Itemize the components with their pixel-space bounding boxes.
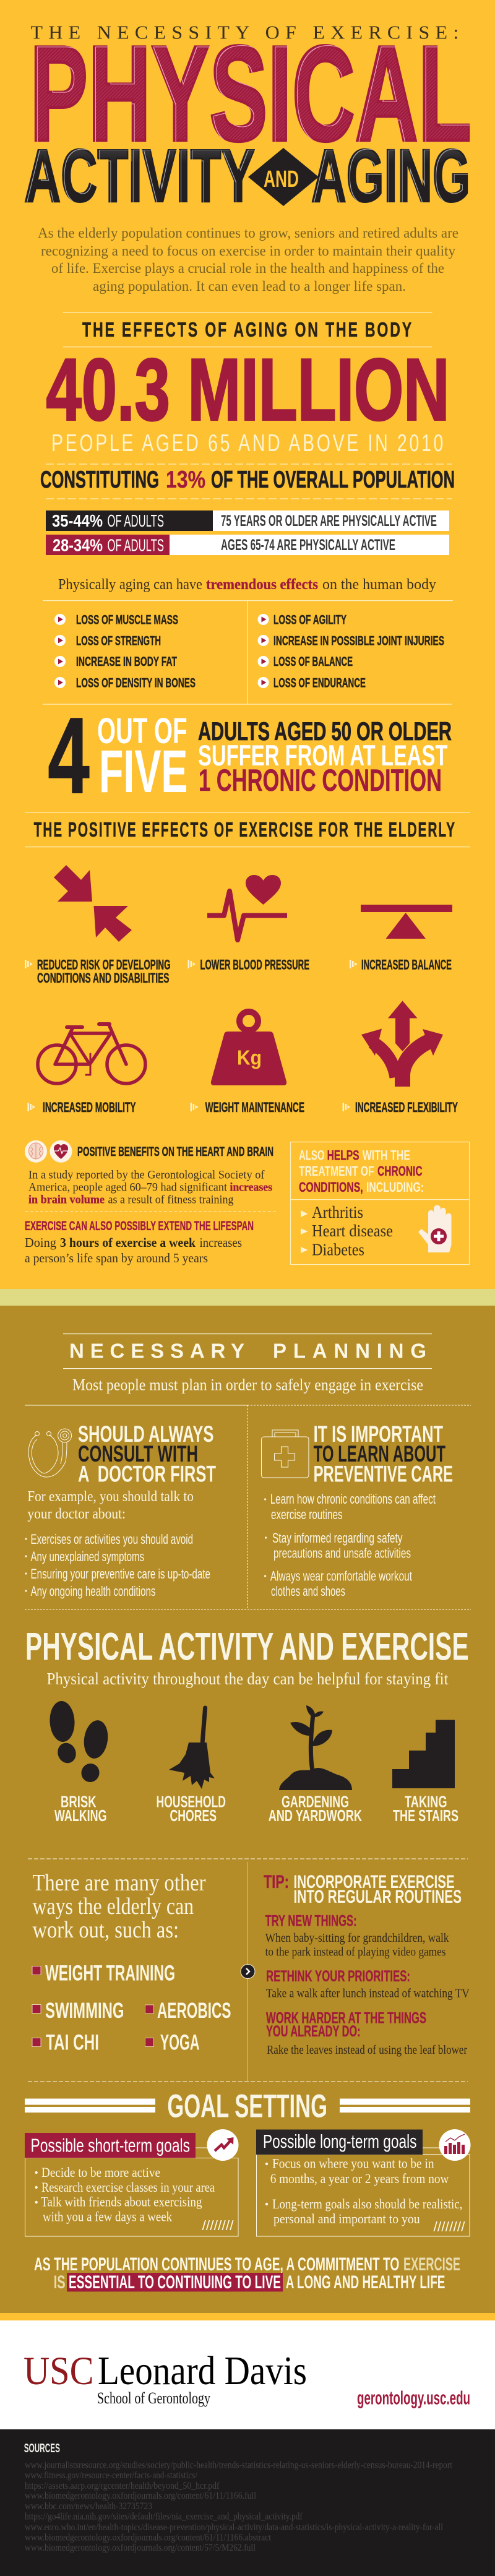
label: increased mobility — [27, 1100, 136, 1115]
lifespan paragraph: increases — [199, 1235, 242, 1250]
icon: kettlebell weight — [211, 1012, 286, 1085]
label: increased balance — [350, 957, 452, 973]
list: long-term goals: 6 months, a year or 2 years from now — [270, 2171, 449, 2186]
label: gardening and yardwork — [269, 1792, 362, 1825]
constituting 13 percent: CONSTITUTING — [40, 467, 159, 493]
list: preventive care: precautions and unsafe activities — [273, 1545, 411, 1561]
label: increased mobility: INCREASED MOBILITY — [43, 1100, 136, 1115]
list: doctor topics: Any ongoing health conditions — [31, 1583, 156, 1599]
tip: work harder: YOU ALREADY DO: — [266, 2023, 361, 2040]
logo: usc leonard davis: USC — [24, 2349, 94, 2393]
logo: usc leonard davis: Leonard Davis — [98, 2348, 307, 2393]
bar: ages 65-74: 28-34% — [53, 536, 103, 554]
text: for example: your doctor about: — [27, 1506, 126, 1522]
icon: stairs — [392, 1720, 455, 1788]
intro paragraph: of life. Exercise plays a crucial role in the health and happiness of the — [51, 261, 444, 276]
lifespan paragraph: Doing — [25, 1235, 56, 1250]
bar: ages 65-74: OF ADULTS — [108, 536, 164, 554]
source list: https://go4life.nia.nih.gov/sites/default/files/nia_exercise_and_physical_activity.pdf — [25, 2512, 303, 2522]
tip: rethink priorities: Take a walk after lunch instead of watching TV — [266, 1988, 470, 2001]
icon: footprints — [49, 1700, 110, 1784]
item: tai chi — [32, 2030, 99, 2054]
label: weight maintenance — [191, 1100, 304, 1115]
title: activity: ACTIVITY — [24, 134, 255, 218]
title block — [24, 19, 471, 218]
text: for example: For example, you should talk to — [27, 1489, 194, 1505]
icon: sprouting plant — [279, 1705, 352, 1790]
header: short-term: Possible short-term goals — [31, 2135, 190, 2156]
stat: 4 out of five: 4 — [48, 695, 89, 816]
list: long-term goals: personal and important to you — [273, 2211, 420, 2226]
source list — [25, 2460, 452, 2553]
list: short-term goals: Talk with friends about exercising — [41, 2194, 202, 2209]
source list: www.biomedgerontology.oxfordjournals.org/content/57/5/M262.full — [25, 2543, 256, 2553]
diamond: and — [248, 148, 319, 206]
heading: necessary planning — [63, 1333, 432, 1369]
label: taking the stairs — [393, 1792, 458, 1825]
source list: www.biomedgerontology.oxfordjournals.org/content/61/11/1166.full — [25, 2491, 256, 2501]
label: taking the stairs: TAKING — [405, 1792, 447, 1811]
panel: long-term goals — [256, 2129, 470, 2236]
heading: goal setting: GOAL SETTING — [167, 2088, 327, 2124]
heading: also helps: ALSO — [299, 1148, 324, 1163]
list: doctor topics — [25, 1531, 210, 1599]
label: reduced risk — [25, 957, 171, 986]
icon: flexibility arrows — [361, 1001, 443, 1087]
text: other ways to work out: There are many other — [32, 1870, 206, 1896]
item: aerobics — [145, 1998, 231, 2023]
list: short-term goals: Decide to be more active — [41, 2165, 160, 2180]
text: for example — [27, 1489, 194, 1522]
lifespan paragraph: 3 hours of exercise a week — [60, 1235, 196, 1250]
heading: also helps: CONDITIONS, — [299, 1179, 363, 1195]
bar: 75 years or older — [46, 510, 449, 531]
study paragraph — [28, 1168, 272, 1207]
section: olive background — [0, 1306, 495, 2313]
icon: bar chart — [439, 2129, 470, 2161]
heading: necessary planning: PLANNING — [273, 1340, 426, 1363]
list: effects of aging — [43, 600, 453, 705]
effects intro line — [58, 576, 437, 593]
list: preventive care: Always wear comfortable workout — [270, 1568, 412, 1584]
tip heading: TIP: — [264, 1872, 289, 1892]
bar: 75 years or older: 35-44% — [52, 511, 103, 530]
icon: rising arrow — [207, 2129, 239, 2161]
label: brisk walking: BRISK — [61, 1792, 97, 1811]
hatch marks: //////// — [202, 2218, 234, 2233]
icon: heart and pulse — [207, 875, 287, 940]
tip: try new things — [265, 1913, 449, 1959]
stat: 4 out of five: OUT OF — [97, 711, 187, 751]
label: household chores: CHORES — [170, 1806, 217, 1825]
item: swimming — [32, 1998, 124, 2023]
bullet: loss of density in bones — [54, 676, 196, 691]
heading: consult a doctor: SHOULD ALWAYS — [78, 1421, 213, 1447]
icon: heart — [50, 1140, 72, 1163]
label: reduced risk: REDUCED RISK OF DEVELOPING — [37, 957, 171, 973]
intro paragraph: aging population. It can even lead to a longer life span. — [93, 278, 406, 294]
tip: work harder — [266, 2010, 467, 2057]
bullet: loss of agility: LOSS OF AGILITY — [273, 613, 346, 627]
closing statement: ESSENTIAL TO CONTINUING TO LIVE — [69, 2272, 281, 2293]
bullet: loss of density in bones: LOSS OF DENSITY IN BONES — [76, 676, 196, 691]
icon: kettlebell weight: Kg — [237, 1046, 262, 1069]
item: weight training: WEIGHT TRAINING — [45, 1960, 175, 1985]
list: preventive care: clothes and shoes — [271, 1583, 345, 1599]
label: household chores: HOUSEHOLD — [156, 1792, 226, 1811]
tip: try new things: TRY NEW THINGS: — [265, 1913, 356, 1929]
icon: broom — [169, 1708, 215, 1789]
list: chronic conditions: Diabetes — [312, 1241, 364, 1259]
dividers: work-out section — [28, 1859, 468, 2082]
bullet: loss of strength — [54, 634, 161, 648]
tip: try new things: When baby-sitting for grandchildren, walk — [265, 1932, 449, 1945]
bullet: loss of strength: LOSS OF STRENGTH — [76, 634, 161, 648]
closing statement: IS — [54, 2272, 66, 2293]
heading: also helps: CHRONIC — [377, 1163, 423, 1179]
list: long-term goals — [265, 2155, 462, 2226]
item: yoga: YOGA — [160, 2030, 199, 2054]
icon: reduced risk arrows — [54, 865, 132, 942]
stat: 4 out of five: FIVE — [99, 738, 188, 805]
icon: balance — [361, 905, 452, 939]
bullet: loss of agility — [257, 613, 346, 627]
section: yellow footer strip — [0, 2313, 495, 2320]
source list: www.fitness.gov/resource-center/facts-and-statistics/ — [25, 2470, 197, 2481]
heading: extend the lifespan: EXERCISE CAN ALSO POSSIBLY EXTEND THE LIFESPAN — [25, 1219, 254, 1233]
bar: 75 years or older: OF ADULTS — [108, 511, 164, 530]
source list: www.bbc.com/news/health-32735723 — [25, 2501, 152, 2512]
icon: chevron button — [241, 1964, 255, 1979]
label: gardening and yardwork: GARDENING — [282, 1792, 349, 1811]
stat: 4 out of five — [48, 695, 452, 816]
heading: also helps: HELPS — [327, 1148, 359, 1163]
heading: goal setting — [25, 2088, 470, 2124]
tip heading — [264, 1872, 462, 1907]
list: doctor topics: Ensuring your preventive care is up-to-date — [31, 1566, 210, 1582]
study paragraph: in brain volume — [28, 1194, 105, 1207]
section: sources background — [0, 2429, 495, 2576]
text: other ways to work out — [32, 1870, 206, 1943]
heading: necessary planning: NECESSARY — [69, 1340, 244, 1363]
bullet: loss of muscle mass: LOSS OF MUSCLE MASS — [76, 613, 178, 627]
bullet: increase in body fat — [54, 655, 177, 669]
heading: also helps — [299, 1148, 424, 1195]
bullet: increase in body fat: INCREASE IN BODY FAT — [76, 655, 177, 669]
logo: usc leonard davis — [24, 2348, 307, 2407]
list: short-term goals — [35, 2165, 215, 2225]
item: tai chi: TAI CHI — [46, 2030, 99, 2054]
sources — [24, 2442, 452, 2553]
icon: bicycle — [38, 1024, 145, 1083]
panel frame: planning columns — [25, 1405, 471, 1609]
section: pale strip — [0, 1289, 495, 1306]
item: weight training — [32, 1960, 175, 1985]
intro paragraph — [38, 225, 458, 294]
lifespan paragraph: a person’s life span by around 5 years — [25, 1251, 208, 1265]
list: chronic conditions: Arthritis — [312, 1203, 363, 1221]
heading: also helps: INCLUDING: — [366, 1179, 424, 1195]
diamond: and: AND — [264, 166, 299, 192]
label: household chores — [156, 1792, 226, 1825]
list: short-term goals: with you a few days a week — [43, 2209, 172, 2225]
study paragraph: In a study reported by the Gerontological Society of — [28, 1168, 265, 1182]
heading: also helps: WITH THE — [363, 1148, 410, 1163]
icon: hand with cross — [418, 1205, 452, 1252]
list: long-term goals: Focus on where you want to be in — [272, 2155, 434, 2171]
kicker: THE NECESSITY OF EXERCISE: — [31, 21, 464, 43]
subtitle: throughout the day: Physical activity throughout the day can be helpful for staying fit — [47, 1669, 449, 1688]
header: long-term: Possible long-term goals — [263, 2130, 417, 2152]
panel: short-term goals — [25, 2129, 239, 2236]
list: chronic conditions: Heart disease — [312, 1221, 393, 1240]
study paragraph: increases — [230, 1181, 272, 1194]
section: white logo band — [0, 2320, 495, 2429]
subtitle: must plan: Most people must plan in order to safely engage in exercise — [72, 1376, 423, 1394]
icon: stethoscope — [28, 1429, 72, 1477]
label: reduced risk: CONDITIONS AND DISABILITIES — [37, 970, 170, 986]
item: aerobics: AEROBICS — [157, 1998, 231, 2023]
intro paragraph: recognizing a need to focus on exercise in order to maintain their quality — [41, 243, 455, 259]
effects intro line: on the human body — [322, 576, 437, 593]
heading: consult a doctor: A DOCTOR FIRST — [78, 1462, 216, 1487]
bullet: loss of muscle mass — [54, 613, 178, 627]
study paragraph: America, people aged 60–79 had significant — [28, 1181, 228, 1194]
label: brisk walking: WALKING — [54, 1806, 106, 1825]
list: preventive care: exercise routines — [271, 1507, 343, 1522]
label: lower blood pressure: LOWER BLOOD PRESSURE — [200, 957, 309, 973]
section: yellow background — [0, 0, 495, 1289]
item: swimming: SWIMMING — [45, 1998, 124, 2023]
source list: www.biomedgerontology.oxfordjournals.org/content/61/11/1166.abstract — [25, 2532, 271, 2543]
text: other ways to work out: work out, such as: — [32, 1917, 179, 1943]
heading: sources: SOURCES — [24, 2442, 60, 2455]
icon: brain — [25, 1140, 47, 1163]
label: brisk walking — [54, 1792, 106, 1825]
tip: rethink priorities: RETHINK YOUR PRIORITIES: — [266, 1968, 410, 1985]
list: doctor topics: Exercises or activities you should avoid — [31, 1531, 193, 1547]
logo: usc leonard davis: School of Gerontology — [97, 2389, 210, 2407]
list: preventive care: Stay informed regarding safety — [272, 1530, 402, 1546]
tip: try new things: to the park instead of playing video games — [265, 1946, 446, 1959]
heading: consult a doctor: CONSULT WITH — [78, 1441, 198, 1467]
label: gardening and yardwork: AND YARDWORK — [269, 1806, 362, 1825]
hatch marks: //////// — [433, 2219, 465, 2234]
intro paragraph: As the elderly population continues to grow, seniors and retired adults are — [38, 225, 458, 241]
tip: work harder: Rake the leaves instead of using the leaf blower — [267, 2044, 467, 2057]
header: short-term — [25, 2133, 196, 2158]
header: long-term — [256, 2130, 423, 2155]
closing statement: EXERCISE — [403, 2254, 460, 2275]
list: long-term goals: Long-term goals also should be realistic, — [272, 2196, 462, 2212]
list: preventive care — [264, 1491, 436, 1599]
closing statement — [34, 2254, 460, 2293]
list: short-term goals: Research exercise classes in your area — [41, 2179, 215, 2195]
study paragraph: as a result of fitness training — [108, 1194, 234, 1207]
list: workouts — [32, 1960, 231, 2054]
heading: also helps: TREATMENT OF — [299, 1163, 374, 1179]
icon: first-aid kit — [261, 1430, 309, 1478]
list: doctor topics: Any unexplained symptoms — [31, 1549, 144, 1564]
heading: positive benefits: POSITIVE BENEFITS ON THE HEART AND BRAIN — [77, 1145, 273, 1159]
label: lower blood pressure — [188, 957, 309, 973]
effects intro line: tremendous effects — [206, 576, 318, 593]
bullet: loss of endurance: LOSS OF ENDURANCE — [273, 676, 366, 691]
bullet: loss of endurance — [257, 676, 366, 691]
bullet: loss of balance: LOSS OF BALANCE — [273, 655, 353, 669]
bullet: loss of balance — [257, 655, 353, 669]
source list: https://assets.aarp.org/rgcenter/health/beyond_50_hcr.pdf — [25, 2481, 220, 2491]
item: yoga — [145, 2030, 199, 2054]
heading: consult a doctor — [78, 1421, 216, 1487]
label: weight maintenance: WEIGHT MAINTENANCE — [205, 1100, 304, 1115]
panel: chronic conditions — [291, 1142, 469, 1265]
constituting 13 percent: 13% — [166, 467, 205, 493]
effects intro line: Physically aging can have — [58, 576, 202, 593]
heading: preventive care — [314, 1421, 453, 1487]
constituting 13 percent — [40, 464, 455, 499]
panel: heart and brain — [25, 1140, 276, 1265]
label: increased flexibility — [343, 1100, 458, 1115]
label: taking the stairs: THE STAIRS — [393, 1806, 458, 1825]
lifespan paragraph — [25, 1235, 242, 1265]
list: chronic conditions — [301, 1203, 393, 1259]
bar: ages 65-74 — [46, 535, 449, 555]
text: other ways to work out: ways the elderly can — [32, 1893, 194, 1919]
tip: rethink priorities — [266, 1968, 470, 2001]
